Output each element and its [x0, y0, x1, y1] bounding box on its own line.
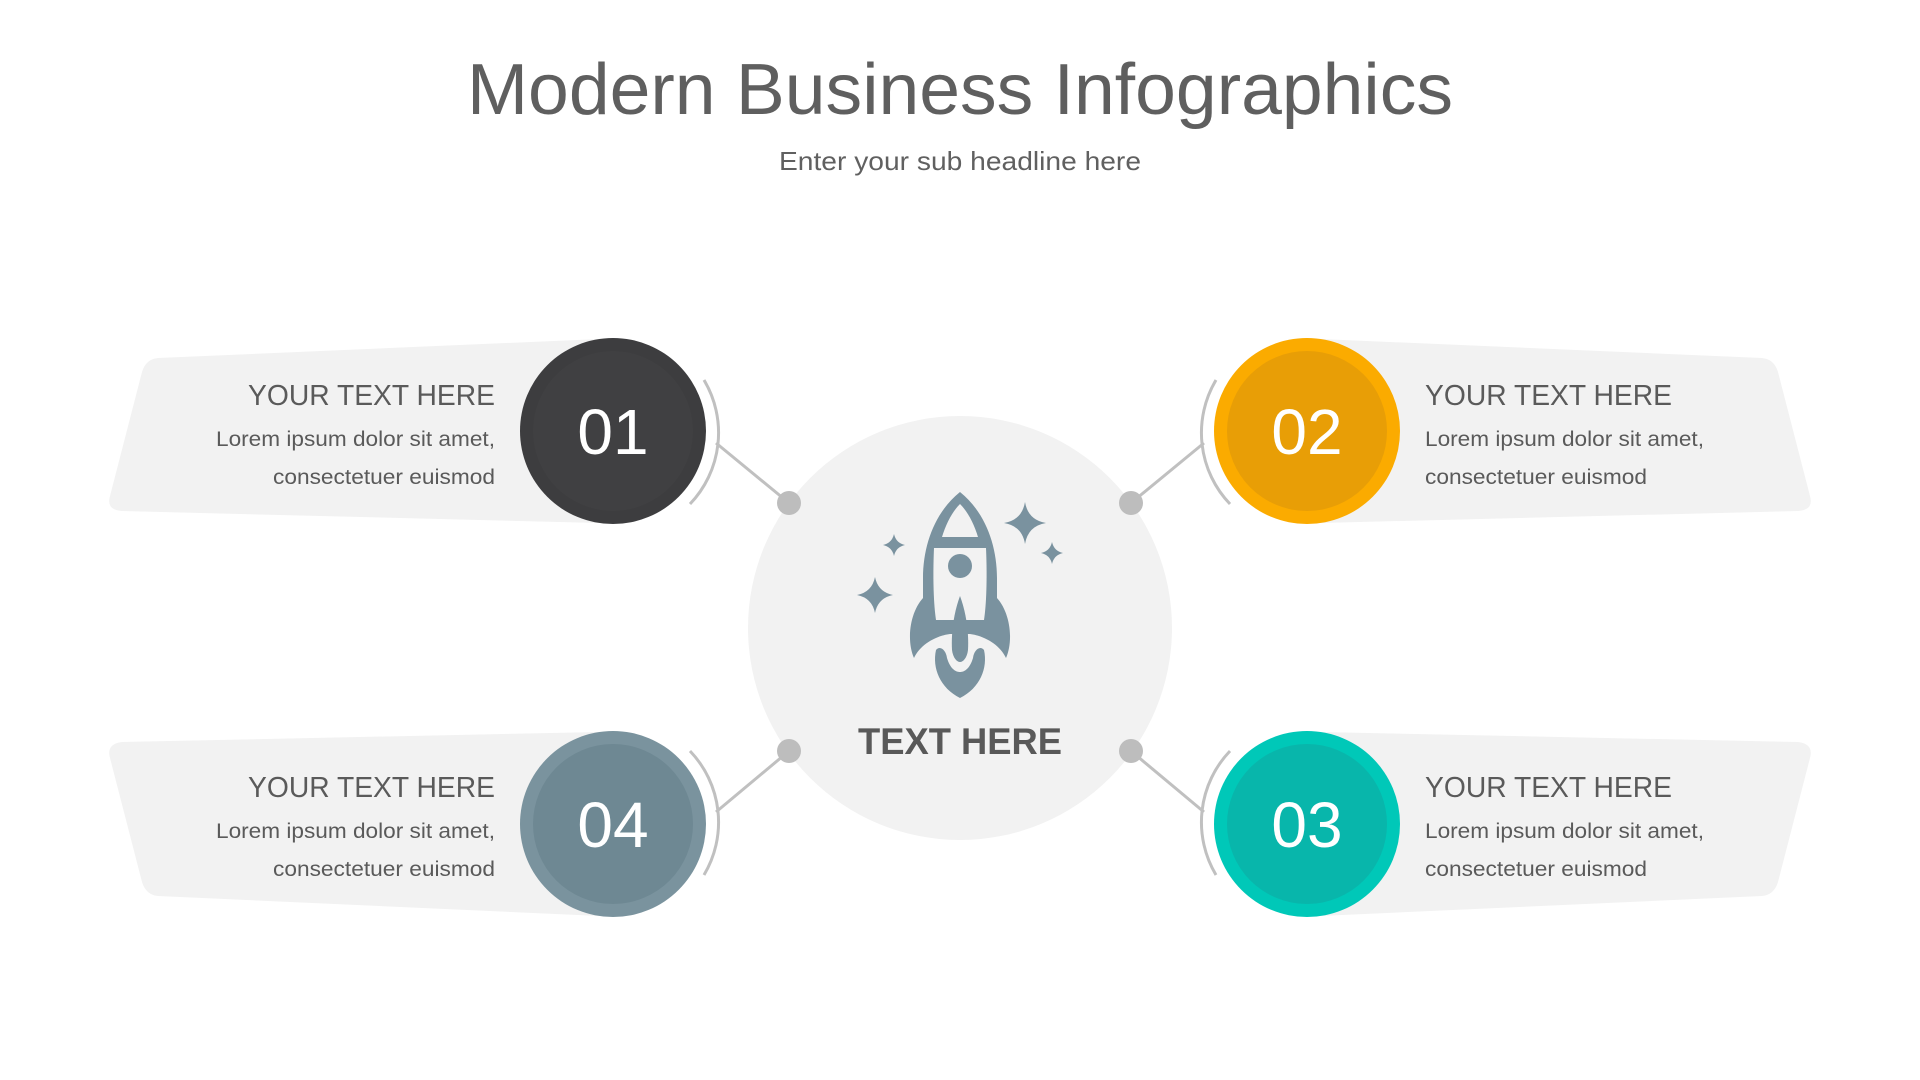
circle 02 [1214, 338, 1400, 524]
circle 03 [1214, 731, 1400, 917]
text 03 [1425, 820, 1704, 881]
text 02: Lorem ipsum dolor sit amet, [1425, 428, 1704, 451]
text 03: consectetuer euismod [1425, 858, 1647, 881]
icon: stars [857, 502, 1063, 613]
heading 03: YOUR TEXT HERE [1425, 772, 1672, 804]
text 02 [1425, 428, 1704, 489]
text 04 [216, 820, 495, 881]
heading 04: YOUR TEXT HERE [248, 772, 495, 804]
circle 04: 04 [577, 789, 649, 861]
subtitle: Enter your sub headline here [779, 146, 1141, 176]
circle 01 [520, 338, 706, 524]
panel: top-right [1320, 339, 1811, 523]
text 01: consectetuer euismod [273, 466, 495, 489]
text 04: Lorem ipsum dolor sit amet, [216, 820, 495, 843]
title: Modern Business Infographics [467, 50, 1453, 130]
text 01 [216, 428, 495, 489]
connectors [690, 380, 1230, 875]
circle 04 [520, 731, 706, 917]
center label: TEXT HERE [858, 721, 1062, 762]
panel: bottom-right [1320, 732, 1811, 916]
text 04: consectetuer euismod [273, 858, 495, 881]
circle 03: 03 [1271, 789, 1343, 861]
text 03: Lorem ipsum dolor sit amet, [1425, 820, 1704, 843]
circle 02: 02 [1271, 396, 1343, 468]
center circle [748, 416, 1172, 840]
connector dots [777, 491, 1143, 763]
panel: top-left [109, 339, 600, 523]
heading 02: YOUR TEXT HERE [1425, 380, 1672, 412]
icon: rocket [910, 492, 1010, 698]
panel: bottom-left [109, 732, 600, 916]
text 01: Lorem ipsum dolor sit amet, [216, 428, 495, 451]
text 02: consectetuer euismod [1425, 466, 1647, 489]
heading 01: YOUR TEXT HERE [248, 380, 495, 412]
circle 01: 01 [577, 396, 649, 468]
